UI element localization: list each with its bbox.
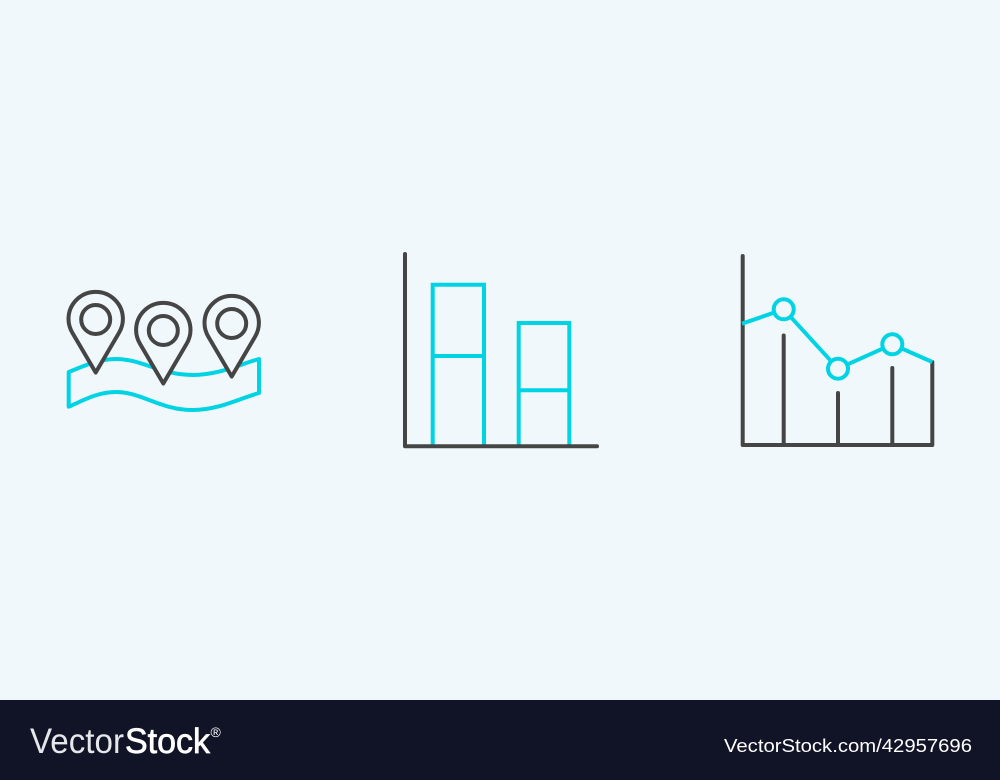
logo wordmark bbox=[30, 722, 210, 761]
logo wordmark: Stock bbox=[125, 722, 210, 761]
axes and columns bbox=[743, 256, 932, 445]
bar 1 bbox=[433, 285, 484, 446]
location pin 1 bbox=[68, 292, 123, 372]
marker 3 bbox=[882, 334, 902, 354]
location pin 2 bbox=[136, 303, 190, 384]
bar 2 bbox=[519, 323, 569, 446]
marker 1 bbox=[774, 299, 794, 319]
footer bar bbox=[0, 700, 1000, 780]
location pin 3 bbox=[204, 296, 259, 376]
trend line bbox=[742, 309, 932, 369]
icon: stacked bar chart bbox=[405, 254, 597, 446]
logo wordmark: Vector bbox=[30, 722, 124, 761]
icon: line chart with markers bbox=[742, 256, 932, 445]
chart axes bbox=[405, 254, 597, 446]
marker 2 bbox=[828, 359, 848, 379]
image id: VectorStock.com/42957696 bbox=[724, 735, 972, 756]
icon: map with three location pins bbox=[68, 292, 259, 410]
map ribbon bbox=[69, 359, 259, 410]
registered mark: ® bbox=[210, 724, 222, 740]
